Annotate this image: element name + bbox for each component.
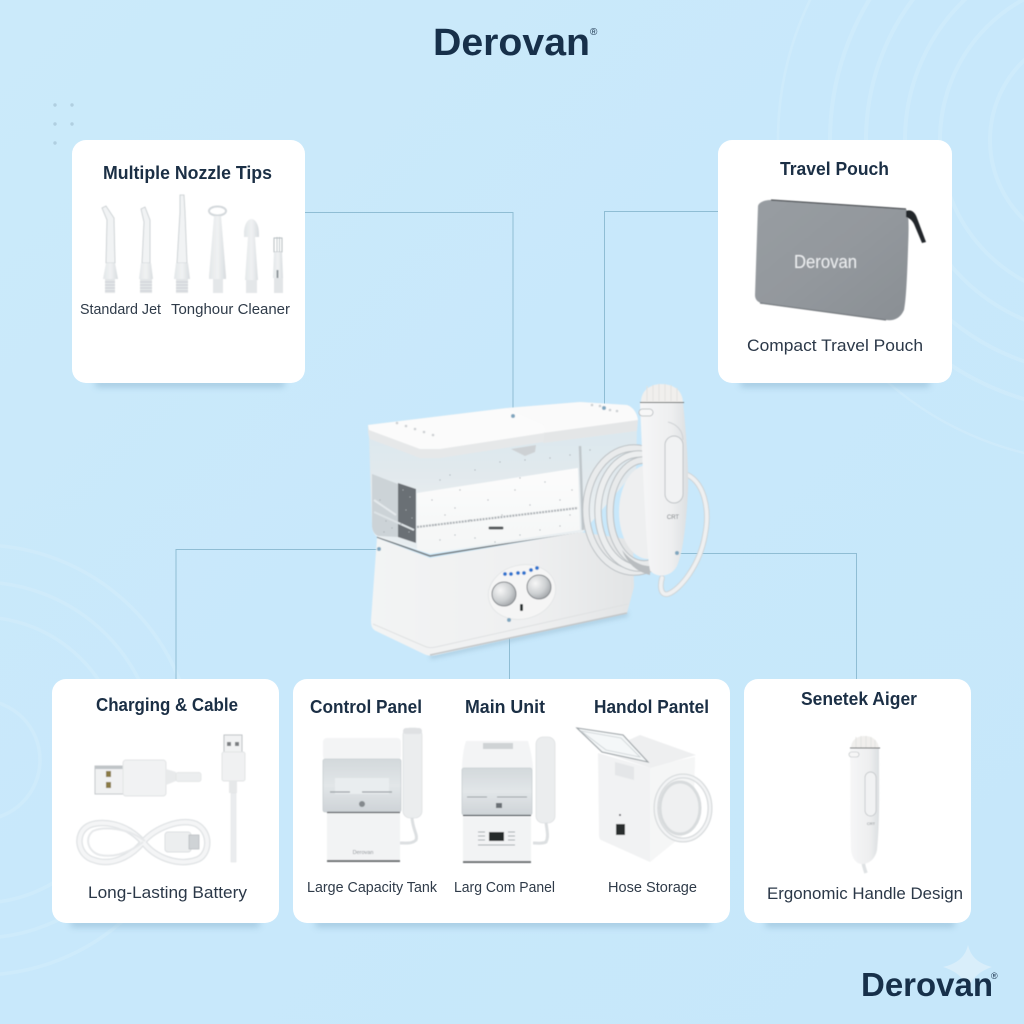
image: front device view (323, 728, 422, 862)
nozzle 4: ring tip (209, 206, 226, 293)
background ripple arcs bottom left (0, 545, 195, 975)
top logo: Derovan (433, 22, 590, 64)
icon: handle (849, 736, 880, 873)
icon: usb plug horizontal (95, 760, 201, 796)
image: front device view: Derovan (353, 850, 373, 856)
nozzle 1 (102, 206, 118, 293)
panel: control, main unit, handle (293, 679, 730, 923)
tank lid (368, 402, 638, 458)
image: main unit view (462, 737, 555, 863)
panel: ergonomic handle (744, 679, 971, 923)
nozzle 5: bulb tip (244, 219, 259, 293)
background ripple arcs top right (778, 0, 1024, 462)
icon: handle: CRT (867, 821, 876, 826)
image: hose storage view (577, 728, 710, 862)
panel: multiple nozzle tips (72, 140, 305, 383)
nozzle 6: brush tip (273, 237, 283, 293)
callout anchor dots (377, 406, 679, 622)
heading: main unit: Main Unit (465, 697, 545, 717)
panel: travel pouch (718, 140, 952, 383)
water tank (369, 426, 637, 554)
hose loop (661, 473, 707, 594)
main product: water flosser (368, 384, 707, 657)
icon: grey zip pouch (755, 200, 926, 320)
nozzle 2 (139, 207, 153, 293)
label: large com panel: Larg Com Panel (454, 880, 555, 896)
lid indicator dots (396, 404, 618, 436)
bubbles (380, 450, 600, 542)
nozzle 3 (174, 195, 190, 293)
top logo: ® (590, 27, 598, 38)
panel: charging and cable (52, 679, 279, 923)
heading: travel pouch: Travel Pouch (780, 159, 889, 179)
coiled hose (586, 448, 682, 575)
label: hose storage: Hose Storage (608, 880, 697, 896)
handle: CRT (667, 515, 679, 521)
icon: nozzle tip set (102, 195, 283, 293)
icon: grey zip pouch: Derovan (794, 252, 857, 272)
icon: usb plug vertical (222, 735, 245, 862)
decorative dot grid (53, 103, 74, 145)
heading: charging and cable: Charging & Cable (96, 695, 238, 715)
device shadow (430, 614, 628, 657)
label: long-lasting battery: Long-Lasting Battery (88, 883, 247, 902)
bottom right logo: Derovan (861, 966, 993, 1003)
handle (639, 384, 688, 576)
knob left (492, 582, 516, 606)
label: standard jet: Standard Jet (80, 302, 161, 318)
label: large capacity tank: Large Capacity Tank (307, 880, 438, 896)
heading: senetek aiger: Senetek Aiger (801, 689, 917, 709)
control panel (482, 558, 562, 626)
heading: multiple nozzle tips: Multiple Nozzle Tips (103, 163, 272, 183)
water body (372, 469, 583, 553)
label: ergonomic handle design: Ergonomic Handle Design (767, 884, 963, 903)
label: compact travel pouch: Compact Travel Pouch (747, 336, 923, 355)
knob right (527, 575, 551, 599)
bottom right star (943, 945, 992, 991)
icon: coiled cable (79, 822, 207, 862)
label: tonghour cleaner: Tonghour Cleaner (171, 302, 290, 318)
heading: control panel: Control Panel (310, 697, 422, 717)
device base (371, 531, 634, 656)
heading: handol pantel: Handol Pantel (594, 697, 709, 717)
card shadows (70, 380, 955, 927)
bottom right logo: ® (991, 971, 998, 981)
left side reflections (398, 483, 416, 543)
leader lines (176, 212, 856, 679)
indicator dots (503, 566, 539, 576)
